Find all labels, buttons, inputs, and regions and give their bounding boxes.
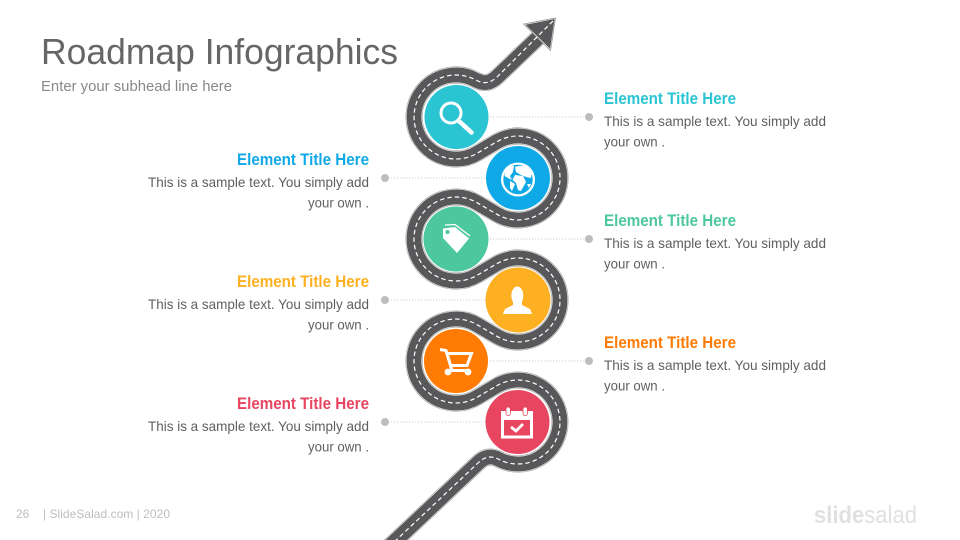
icon: shopping cart [424,329,488,393]
text block: element 3: your own . [604,256,665,272]
text block: element 3 [604,212,826,272]
icon: globe [486,146,550,210]
text block: element 2: your own . [308,194,369,210]
text block: element 4: your own . [308,316,369,332]
winding road with arrow [375,18,560,540]
text block: element 6: This is a sample text. You simply add [148,418,369,434]
leader lines and dots [381,113,593,426]
text block: element 6: Element Title Here [237,395,369,413]
icon: magnifier [424,85,488,149]
subtitle: Enter your subhead line here [41,78,232,95]
text block: element 1: Element Title Here [604,90,736,108]
title: Roadmap Infographics [41,31,398,72]
text block: element 2: This is a sample text. You simply add [148,174,369,190]
icon: calendar [486,390,550,454]
text block: element 6: your own . [308,438,369,454]
footer: | SlideSalad.com | 2020 [43,507,170,521]
text block: element 1: This is a sample text. You simply add [604,113,826,129]
text block: element 3: This is a sample text. You simply add [604,235,826,251]
text block: element 3: Element Title Here [604,212,736,230]
text block: element 5: your own . [604,378,665,394]
text block: element 4: Element Title Here [237,273,369,291]
text block: element 4: This is a sample text. You simply add [148,296,369,312]
text block: element 5: Element Title Here [604,334,736,352]
logo: slidesalad wordmark: slidesalad [814,502,917,529]
text block: element 4 [148,273,369,332]
footer: 26 [16,507,30,521]
text block: element 6 [148,395,369,454]
text block: element 2 [148,151,369,210]
icon: price tag [424,206,488,272]
text block: element 5 [604,334,826,394]
text block: element 2: Element Title Here [237,151,369,169]
icon: user [486,268,550,332]
text block: element 1 [604,90,826,150]
text block: element 5: This is a sample text. You simply add [604,357,826,373]
text block: element 1: your own . [604,134,665,150]
